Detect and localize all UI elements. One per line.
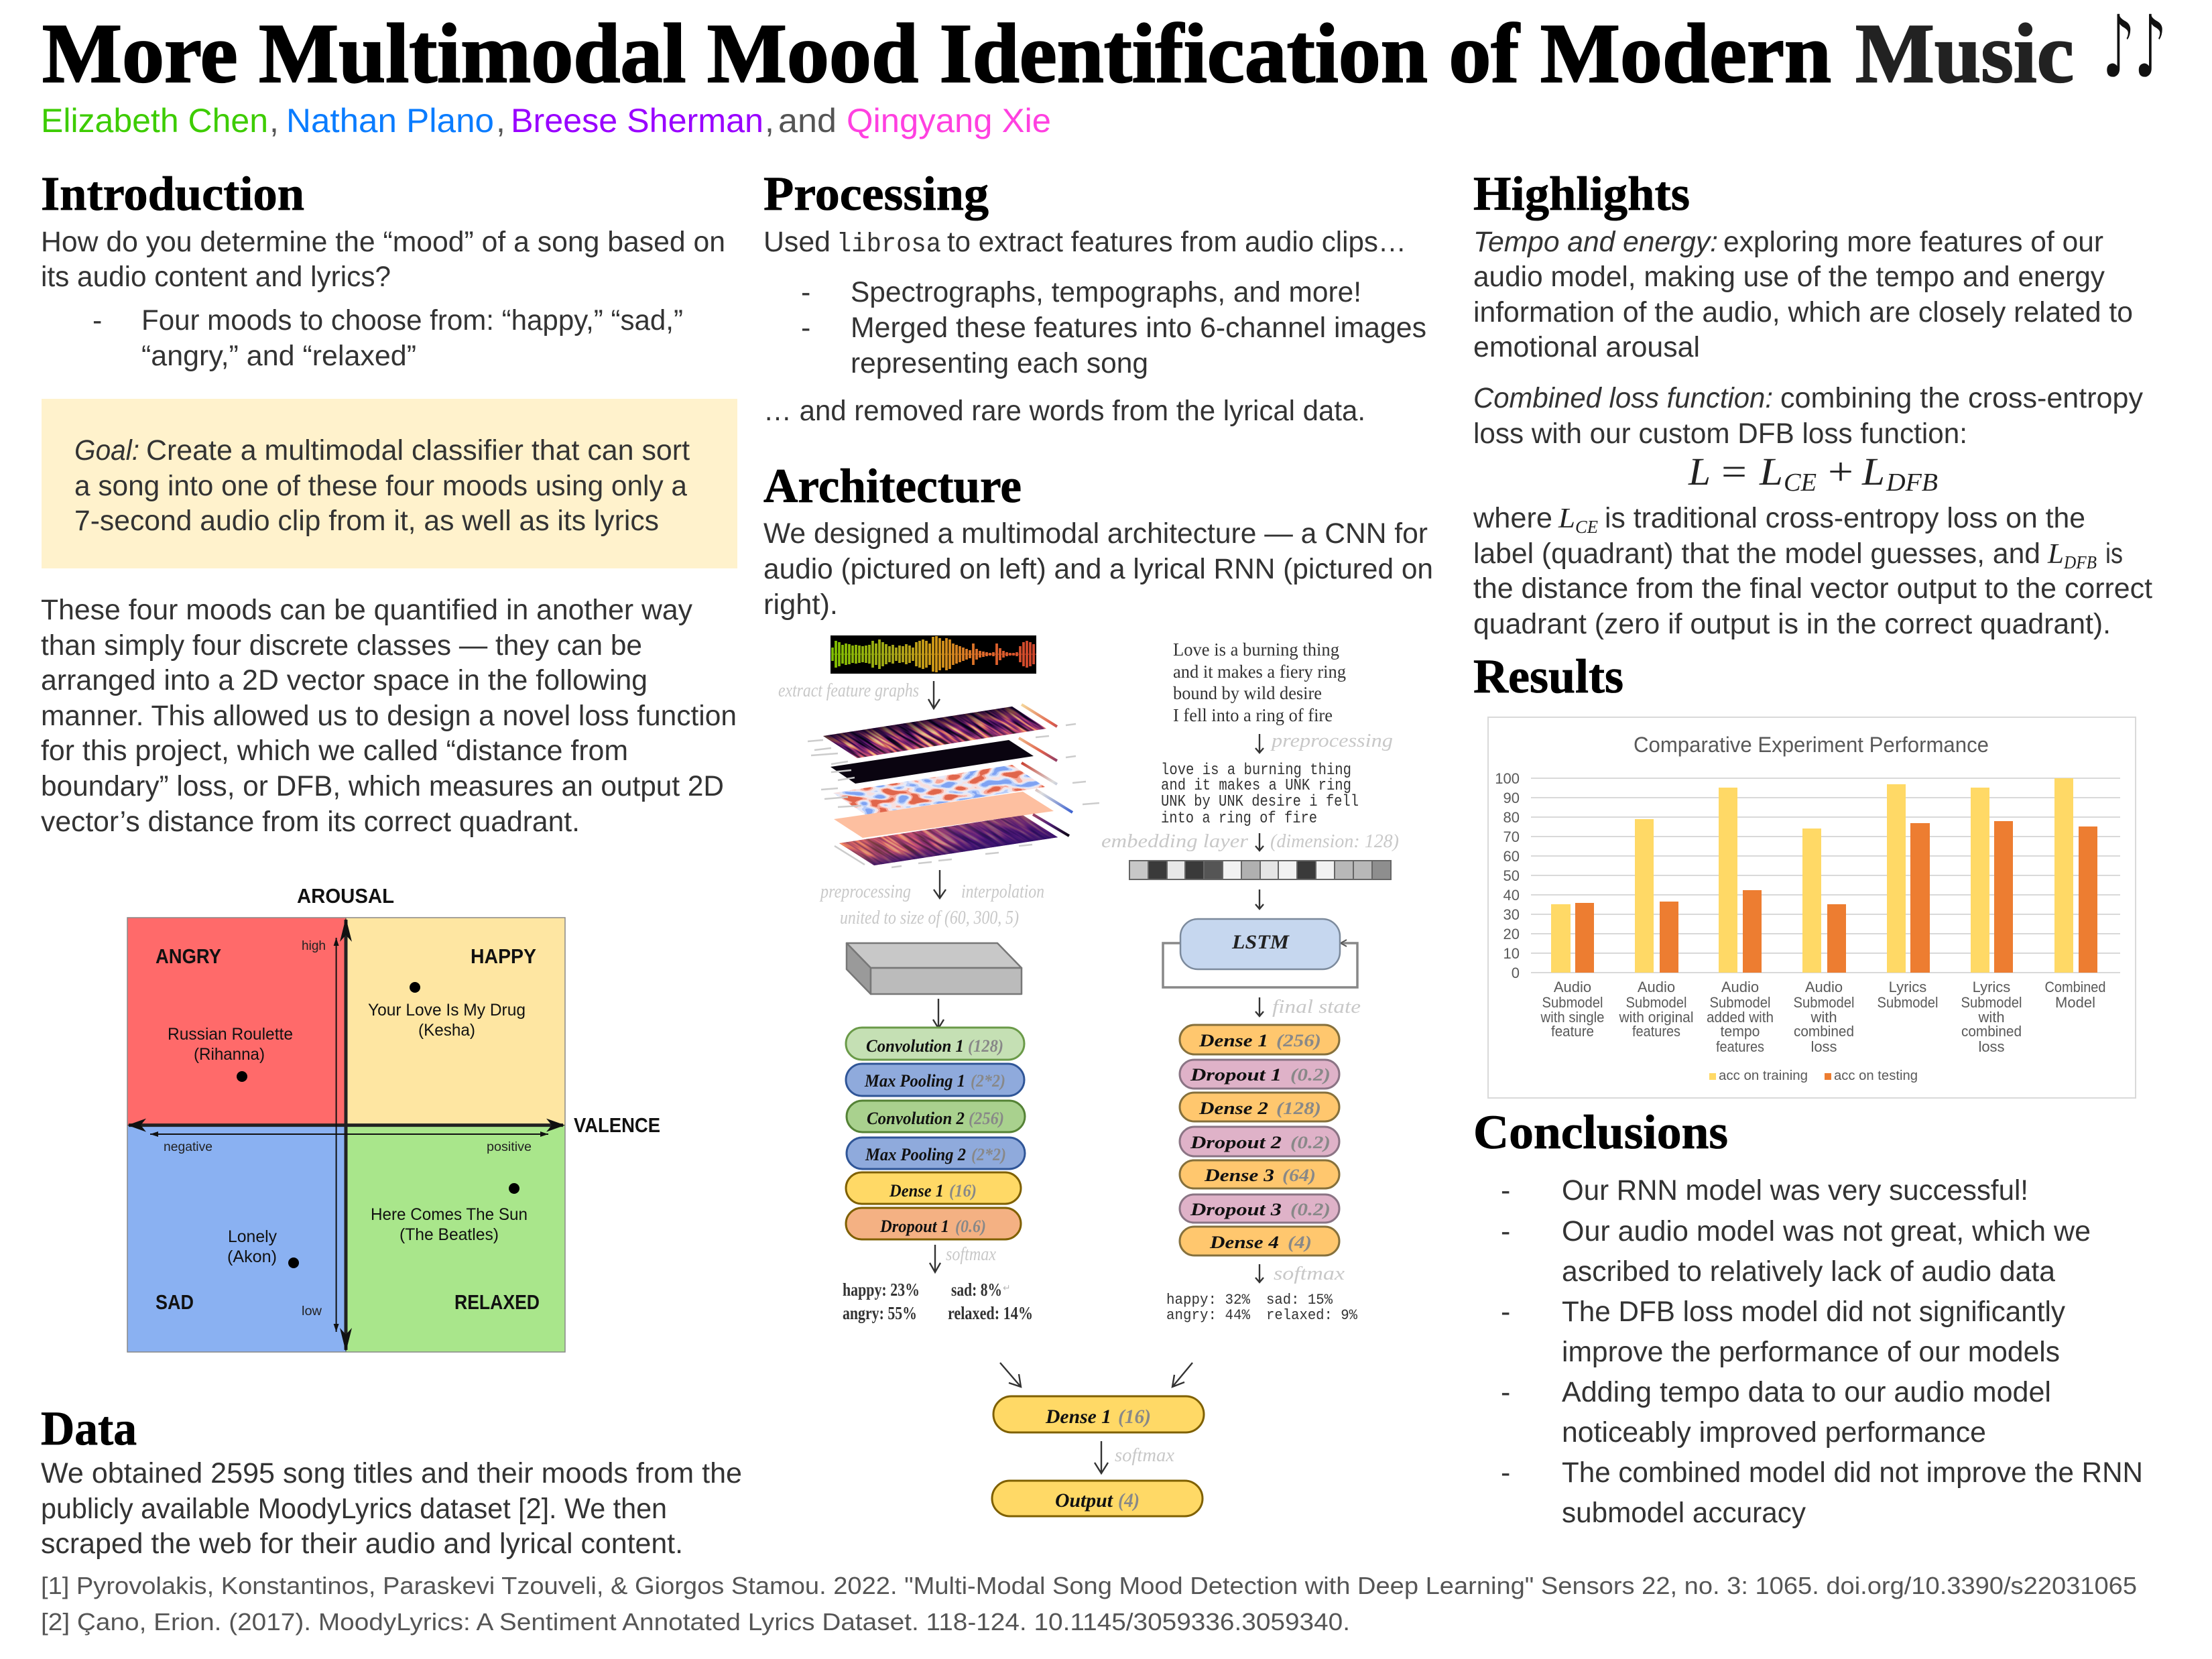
layer: convolution 1: (128)	[968, 1036, 1003, 1056]
bar chart: comparative experiment performance: loss	[1978, 1038, 2005, 1055]
label: cnn softmax: softmax	[946, 1244, 996, 1265]
references: [1] Pyrovolakis, Konstantinos, Paraskevi Tzouveli, & Giorgos Stamou. 2022. "Multi-Modal Song Mood Detection with Deep Learning" Sensors 22, no. 3: 1065. doi.org/10.3390/s22031065	[41, 1572, 2137, 1599]
formula: combined loss: L	[1759, 450, 1783, 493]
chart: valence arousal quadrant: Here Comes The Sun	[371, 1205, 528, 1224]
bar chart: comparative experiment performance: with original	[1619, 1009, 1693, 1026]
rnn output probabilities: relaxed: 9%	[1266, 1307, 1358, 1324]
bar chart: comparative experiment performance: feature	[1551, 1023, 1594, 1040]
panel: highlights	[1473, 167, 2152, 640]
authors: and	[778, 102, 837, 139]
layer: rnn dense 2	[1180, 1093, 1339, 1121]
processing text: … and removed rare words from the lyrical data.	[763, 395, 1365, 427]
label: lyrics preprocessing: preprocessing	[1270, 731, 1393, 751]
chart: valence arousal quadrant: (Kesha)	[418, 1021, 475, 1040]
chart: valence arousal quadrant: negative	[164, 1140, 212, 1154]
references: [2] Çano, Erion. (2017). MoodyLyrics: A Sentiment Annotated Lyrics Dataset. 118-124. 10.1145/3059336.3059340.	[41, 1608, 1350, 1636]
heading: architecture: Architecture	[763, 459, 1022, 513]
loss explanation text: where	[1473, 502, 1552, 534]
label: final state: final state	[1272, 997, 1361, 1018]
architecture text: audio (pictured on left) and a lyrical RNN (pictured on	[763, 553, 1433, 585]
bar chart: comparative experiment performance: features	[1632, 1023, 1680, 1040]
rnn output probabilities: sad: 15%	[1266, 1292, 1333, 1308]
intro text: “angry,” and “relaxed”	[141, 340, 416, 372]
lyrics RNN layers	[1180, 1025, 1339, 1255]
conclusions bullet list: Our audio model was not great, which we	[1562, 1215, 2091, 1247]
bar chart: comparative experiment performance: 100	[1495, 770, 1520, 787]
tempo and energy text: emotional arousal	[1473, 331, 1700, 363]
bar chart: comparative experiment performance: Submodel	[1961, 994, 2022, 1011]
cnn output probabilities: angry: 55%	[843, 1303, 917, 1323]
layer: rnn dense 1	[1180, 1025, 1339, 1054]
layer: rnn dropout 1: Dropout 1	[1190, 1065, 1282, 1085]
loss explanation text: is	[2105, 538, 2123, 570]
layer: rnn dense 2: Dense 2	[1199, 1099, 1268, 1118]
layer: merged dense	[993, 1396, 1204, 1432]
data text: scraped the web for their audio and lyrical content.	[41, 1528, 683, 1560]
authors: Breese Sherman	[511, 102, 763, 139]
arrow: rnn softmax	[1255, 1264, 1264, 1282]
callout: goal: a song into one of these four moods using only a	[74, 470, 687, 502]
layer: merged dense: Dense 1	[1045, 1406, 1111, 1428]
conclusions bullet list: submodel accuracy	[1562, 1497, 1806, 1529]
arrow: tensor to convolution	[933, 999, 944, 1028]
lstm block with loop: LSTM	[1231, 931, 1290, 953]
bar chart: comparative experiment performance: Audio	[1721, 979, 1759, 995]
layer: rnn dense 4: (4)	[1288, 1233, 1312, 1252]
cnn output probabilities: happy: 23%	[843, 1280, 920, 1300]
layer: dropout 1: Dropout 1	[879, 1217, 949, 1236]
icon: audio waveform	[831, 635, 1036, 674]
panel: introduction	[41, 167, 737, 838]
tempo and energy text	[1473, 226, 2133, 363]
loss explanation text: DFB	[2063, 552, 2097, 572]
conclusions bullet list: Our RNN model was very successful!	[1562, 1174, 2028, 1207]
title: ♪♪	[2103, 0, 2166, 97]
loss explanation text: is traditional cross-entropy loss on the	[1605, 502, 2085, 534]
layer: rnn dense 1: (256)	[1276, 1031, 1321, 1050]
bar chart: comparative experiment performance: Model	[2055, 994, 2095, 1011]
callout: goal: 7-second audio clip from it, as well as its lyrics	[74, 505, 659, 537]
icon: input tensor block	[847, 943, 1022, 994]
processing text: Used	[763, 226, 831, 258]
labels: embedding layer: embedding layer	[1101, 831, 1248, 852]
panel: processing	[763, 167, 1426, 427]
conclusions bullet list: noticeably improved performance	[1562, 1416, 1986, 1449]
heading: highlights: Highlights	[1473, 167, 1690, 221]
combined loss text: loss with our custom DFB loss function:	[1473, 418, 1967, 450]
bar chart: comparative experiment performance: 10	[1503, 945, 1520, 962]
preprocessing labels: united to size of (60, 300, 5)	[840, 908, 1019, 928]
bar chart: comparative experiment performance: loss	[1810, 1038, 1837, 1055]
processing text: librosa	[837, 230, 941, 260]
conclusions bullet list: -	[1501, 1215, 1510, 1247]
layer: rnn dropout 1	[1180, 1060, 1339, 1089]
labels: embedding layer: (dimension: 128)	[1270, 831, 1399, 852]
arrow: feature graphs to tensor	[934, 870, 946, 898]
preprocessing labels: preprocessing	[819, 881, 911, 902]
bar chart: comparative experiment performance: acc on training	[1719, 1068, 1808, 1083]
heading: processing: Processing	[763, 167, 989, 221]
combined loss text: Combined loss function:	[1473, 382, 1773, 414]
label: rnn softmax: softmax	[1274, 1264, 1345, 1284]
panel: architecture	[763, 459, 1433, 1516]
authors: ,	[496, 102, 505, 139]
layer: rnn dropout 2: Dropout 2	[1190, 1133, 1282, 1152]
bar chart: comparative experiment performance: 50	[1503, 867, 1520, 884]
chart: valence arousal quadrant: VALENCE	[574, 1113, 660, 1137]
preprocessing labels	[819, 881, 1044, 928]
chart: valence arousal quadrant: Russian Roulette	[168, 1025, 293, 1044]
authors: ,	[269, 102, 279, 139]
processing text: -	[801, 312, 810, 344]
layer: max pooling 1: Max Pooling 1	[864, 1071, 965, 1091]
lyrics input text: bound by wild desire	[1173, 683, 1322, 703]
intro text	[41, 226, 725, 372]
layer: rnn dense 3: (64)	[1282, 1166, 1316, 1185]
bar chart: comparative experiment performance: 40	[1503, 887, 1520, 904]
formula: combined loss	[1688, 450, 1938, 497]
bar chart: comparative experiment performance: acc on testing	[1834, 1068, 1918, 1083]
bar chart: comparative experiment performance: Audio	[1554, 979, 1591, 995]
processing text: to extract features from audio clips…	[947, 226, 1406, 258]
arrow: lyrics preprocessing	[1255, 734, 1264, 753]
bar chart: comparative experiment performance: Submodel	[1794, 994, 1854, 1011]
layer: convolution 2: Convolution 2	[867, 1109, 965, 1128]
bar chart: comparative experiment performance: 70	[1503, 828, 1520, 845]
loss explanation text	[1473, 502, 2152, 640]
bar chart: comparative experiment performance: Submodel	[1877, 994, 1939, 1011]
layer: rnn dropout 3: (0.2)	[1290, 1200, 1331, 1219]
bar chart: comparative experiment performance: 30	[1503, 906, 1520, 923]
layer: dense 1	[846, 1172, 1021, 1204]
lyrics input text: I fell into a ring of fire	[1173, 705, 1333, 725]
authors: Nathan Plano	[286, 102, 494, 139]
architecture text: right).	[763, 589, 838, 621]
layer: rnn dense 3: Dense 3	[1204, 1166, 1274, 1185]
bar chart: comparative experiment performance: Audio	[1805, 979, 1843, 995]
combined loss text	[1473, 382, 2143, 450]
lyrics input text: and it makes a fiery ring	[1173, 662, 1346, 682]
data text	[41, 1457, 742, 1560]
label: extract feature graphs: extract feature graphs	[778, 680, 919, 701]
layer: convolution 2: (256)	[969, 1109, 1004, 1128]
data text: We obtained 2595 song titles and their moods from the	[41, 1457, 742, 1489]
conclusions bullet list: -	[1501, 1174, 1510, 1207]
panel: conclusions	[1473, 1105, 2143, 1529]
data text: publicly available MoodyLyrics dataset [2]. We then	[41, 1493, 667, 1525]
arrow: cnn softmax	[930, 1245, 940, 1272]
conclusions bullet list: The DFB loss model did not significantly	[1562, 1296, 2065, 1328]
chart: valence arousal quadrant: (Akon)	[227, 1247, 277, 1266]
callout: goal	[42, 399, 737, 568]
authors: Elizabeth Chen	[41, 102, 268, 139]
intro text: Four moods to choose from: “happy,” “sad,”	[141, 304, 683, 336]
authors: Qingyang Xie	[847, 102, 1051, 139]
heading: results: Results	[1473, 650, 1623, 703]
formula: combined loss: CE	[1784, 469, 1817, 497]
authors: ,	[765, 102, 774, 139]
bar chart: comparative experiment performance: combined	[1794, 1023, 1854, 1040]
layer: max pooling 2: Max Pooling 2	[865, 1145, 966, 1164]
bar chart: comparative experiment performance: 0	[1512, 965, 1520, 981]
layer: rnn dropout 2: (0.2)	[1290, 1133, 1331, 1152]
conclusions bullet list	[1501, 1174, 2143, 1529]
chart: valence arousal quadrant: positive	[487, 1140, 532, 1154]
layer: output: (4)	[1118, 1489, 1140, 1512]
preprocessed lyrics text	[1161, 761, 1359, 828]
conclusions bullet list: The combined model did not improve the RNN	[1562, 1457, 2143, 1489]
layer: output	[992, 1481, 1203, 1516]
cnn output probabilities: ↵	[1003, 1284, 1011, 1294]
rnn output probabilities	[1166, 1292, 1358, 1324]
chart: valence arousal quadrant	[127, 884, 660, 1352]
bar chart: comparative experiment performance: features	[1716, 1038, 1764, 1055]
panel: data	[41, 1402, 742, 1560]
processing text: representing each song	[851, 347, 1148, 379]
layer: dense 1: Dense 1	[889, 1181, 944, 1201]
preprocessed lyrics text: into a ring of fire	[1161, 810, 1317, 828]
processing text: Merged these features into 6-channel images	[851, 312, 1426, 344]
layer: rnn dropout 3: Dropout 3	[1190, 1200, 1282, 1219]
arrow: embedding	[1255, 833, 1264, 851]
heading: introduction: Introduction	[41, 167, 304, 221]
processing text	[763, 226, 1426, 427]
moods explanation text: boundary” loss, or DFB, which measures an output 2D	[41, 770, 724, 802]
loss explanation text: L	[1558, 503, 1575, 534]
bar chart: comparative experiment performance: Submodel	[1542, 994, 1603, 1011]
bar chart: comparative experiment performance: with single	[1540, 1009, 1605, 1026]
tempo and energy text: information of the audio, which are closely related to	[1473, 296, 2133, 328]
arrow: embedding to lstm	[1255, 889, 1264, 909]
bar chart: comparative experiment performance: Submodel	[1709, 994, 1771, 1011]
bar chart: comparative experiment performance: Submodel	[1626, 994, 1686, 1011]
bar chart: comparative experiment performance: Combined	[2044, 979, 2106, 995]
intro text: its audio content and lyrics?	[41, 261, 391, 293]
chart: valence arousal quadrant: low	[302, 1304, 322, 1318]
preprocessed lyrics text: UNK by UNK desire i fell	[1161, 793, 1359, 811]
bar chart: comparative experiment performance: 20	[1503, 926, 1520, 942]
formula: combined loss: =	[1721, 450, 1747, 493]
callout: goal: Create a multimodal classifier that can sort	[146, 434, 690, 467]
heading: conclusions: Conclusions	[1473, 1105, 1728, 1159]
chart: valence arousal quadrant: HAPPY	[471, 944, 536, 968]
intro text: How do you determine the “mood” of a song based on	[41, 226, 725, 258]
loss explanation text: label (quadrant) that the model guesses, and	[1473, 538, 2040, 570]
conclusions bullet list: Adding tempo data to our audio model	[1562, 1376, 2051, 1408]
chart: valence arousal quadrant: (Rihanna)	[194, 1045, 265, 1064]
architecture text: We designed a multimodal architecture — a CNN for	[763, 517, 1428, 550]
arrow: merged softmax	[1095, 1441, 1108, 1473]
formula: combined loss: +	[1828, 450, 1853, 493]
conclusions bullet list: -	[1501, 1296, 1510, 1328]
layer: dropout 1: (0.6)	[955, 1217, 986, 1236]
chart: valence arousal quadrant: Your Love Is My Drug	[368, 1001, 526, 1020]
moods explanation text: These four moods can be quantified in another way	[41, 594, 692, 626]
heading: data: Data	[41, 1402, 137, 1455]
chart: valence arousal quadrant: (The Beatles)	[400, 1225, 499, 1244]
bar chart: comparative experiment performance: Comparative Experiment Performance	[1634, 733, 1989, 757]
bar chart: comparative experiment performance: 80	[1503, 809, 1520, 826]
combined loss text: combining the cross-entropy	[1780, 382, 2143, 414]
chart: valence arousal quadrant: high	[302, 939, 326, 953]
label: merged softmax: softmax	[1115, 1445, 1175, 1466]
title: More Multimodal Mood Identification of Modern	[42, 7, 1831, 101]
lstm block with loop	[1163, 919, 1357, 987]
conclusions bullet list: -	[1501, 1457, 1510, 1489]
bar chart: comparative experiment performance: with	[1977, 1009, 2005, 1026]
labels: embedding layer	[1101, 831, 1399, 852]
moods explanation text: for this project, which we called “distance from	[41, 735, 628, 767]
layer: convolution 1	[846, 1028, 1024, 1060]
audio CNN layers	[846, 1028, 1025, 1239]
layer: rnn dropout 1: (0.2)	[1290, 1065, 1331, 1085]
moods explanation text: vector’s distance from its correct quadrant.	[41, 806, 580, 838]
cnn output probabilities	[843, 1280, 1033, 1323]
chart: valence arousal quadrant: AROUSAL	[297, 884, 394, 908]
layer: max pooling 1	[846, 1064, 1024, 1096]
rnn output probabilities: angry: 44%	[1166, 1307, 1251, 1324]
layer: max pooling 2	[847, 1138, 1025, 1169]
loss explanation text: quadrant (zero if output is in the correct quadrant).	[1473, 608, 2111, 640]
layer: rnn dense 4	[1180, 1227, 1339, 1255]
chart: valence arousal quadrant: ANGRY	[156, 944, 221, 968]
architecture text	[763, 517, 1433, 621]
layer: max pooling 2: (2*2)	[971, 1145, 1006, 1164]
authors	[41, 102, 1051, 139]
cnn output probabilities: sad: 8%	[951, 1280, 1002, 1300]
layer: convolution 2	[847, 1101, 1025, 1132]
preprocessed lyrics text: and it makes a UNK ring	[1161, 777, 1351, 795]
layer: merged dense: (16)	[1118, 1406, 1151, 1428]
bar chart: comparative experiment performance: tempo	[1720, 1023, 1760, 1040]
bar chart: comparative experiment performance: 90	[1503, 790, 1520, 806]
arrows: submodels merging	[1000, 1363, 1192, 1387]
arrow: waveform to feature graphs	[928, 681, 940, 709]
panel: results	[1473, 650, 2136, 1098]
processing text: -	[801, 276, 810, 308]
layer: dropout 1	[846, 1208, 1021, 1239]
embedding vector	[1129, 861, 1391, 879]
loss explanation text: L	[2047, 539, 2064, 570]
tempo and energy text: audio model, making use of the tempo and energy	[1473, 261, 2105, 293]
references	[41, 1572, 2137, 1636]
title: Music	[1855, 7, 2074, 101]
chart: valence arousal quadrant: Lonely	[228, 1227, 277, 1246]
cnn output probabilities: relaxed: 14%	[948, 1303, 1033, 1323]
layer: rnn dense 3	[1180, 1160, 1339, 1188]
tempo and energy text: Tempo and energy:	[1473, 226, 1718, 258]
moods explanation text: arranged into a 2D vector space in the following	[41, 664, 648, 696]
bar chart: comparative experiment performance: with	[1810, 1009, 1837, 1026]
bar chart: comparative experiment performance: Lyrics	[1889, 979, 1926, 995]
moods explanation text	[41, 594, 737, 838]
layer: max pooling 1: (2*2)	[971, 1071, 1005, 1091]
chart: valence arousal quadrant: RELAXED	[454, 1290, 540, 1314]
formula: combined loss: DFB	[1886, 469, 1938, 497]
feature graph stack	[808, 704, 1099, 867]
preprocessing labels: interpolation	[961, 881, 1044, 902]
tempo and energy text: exploring more features of our	[1723, 226, 2103, 258]
bar chart: comparative experiment performance: added with	[1707, 1009, 1774, 1026]
arrow: lstm final state	[1255, 997, 1264, 1016]
moods explanation text: than simply four discrete classes — they can be	[41, 629, 642, 662]
layer: rnn dense 1: Dense 1	[1199, 1031, 1268, 1050]
bar chart: comparative experiment performance	[1488, 717, 2136, 1098]
chart: valence arousal quadrant: SAD	[156, 1290, 194, 1314]
lyrics input text	[1173, 639, 1346, 725]
conclusions bullet list: improve the performance of our models	[1562, 1336, 2060, 1368]
layer: rnn dropout 2	[1180, 1127, 1339, 1156]
layer: rnn dropout 3	[1180, 1194, 1339, 1223]
layer: rnn dense 4: Dense 4	[1209, 1233, 1279, 1252]
intro text: -	[93, 304, 102, 336]
conclusions bullet list: -	[1501, 1376, 1510, 1408]
layer: convolution 1: Convolution 1	[866, 1036, 964, 1056]
preprocessed lyrics text: love is a burning thing	[1161, 761, 1351, 780]
rnn output probabilities: happy: 32%	[1166, 1292, 1251, 1308]
bar chart: comparative experiment performance: 60	[1503, 848, 1520, 865]
formula: combined loss: L	[1688, 450, 1711, 493]
loss explanation text: the distance from the final vector output to the correct	[1473, 572, 2152, 605]
layer: rnn dense 2: (128)	[1276, 1099, 1321, 1118]
layer: output: Output	[1055, 1489, 1114, 1512]
bar chart: comparative experiment performance: Lyrics	[1973, 979, 2010, 995]
moods explanation text: manner. This allowed us to design a novel loss function	[41, 700, 737, 732]
bar chart: comparative experiment performance: Audio	[1638, 979, 1675, 995]
formula: combined loss: L	[1861, 450, 1885, 493]
layer: dense 1: (16)	[949, 1181, 977, 1201]
bar chart: comparative experiment performance: combined	[1961, 1023, 2022, 1040]
processing text: Spectrographs, tempographs, and more!	[851, 276, 1361, 308]
loss explanation text: CE	[1575, 517, 1598, 537]
callout: goal: Goal:	[74, 434, 139, 467]
conclusions bullet list: ascribed to relatively lack of audio data	[1562, 1255, 2055, 1288]
lyrics input text: Love is a burning thing	[1173, 639, 1339, 660]
